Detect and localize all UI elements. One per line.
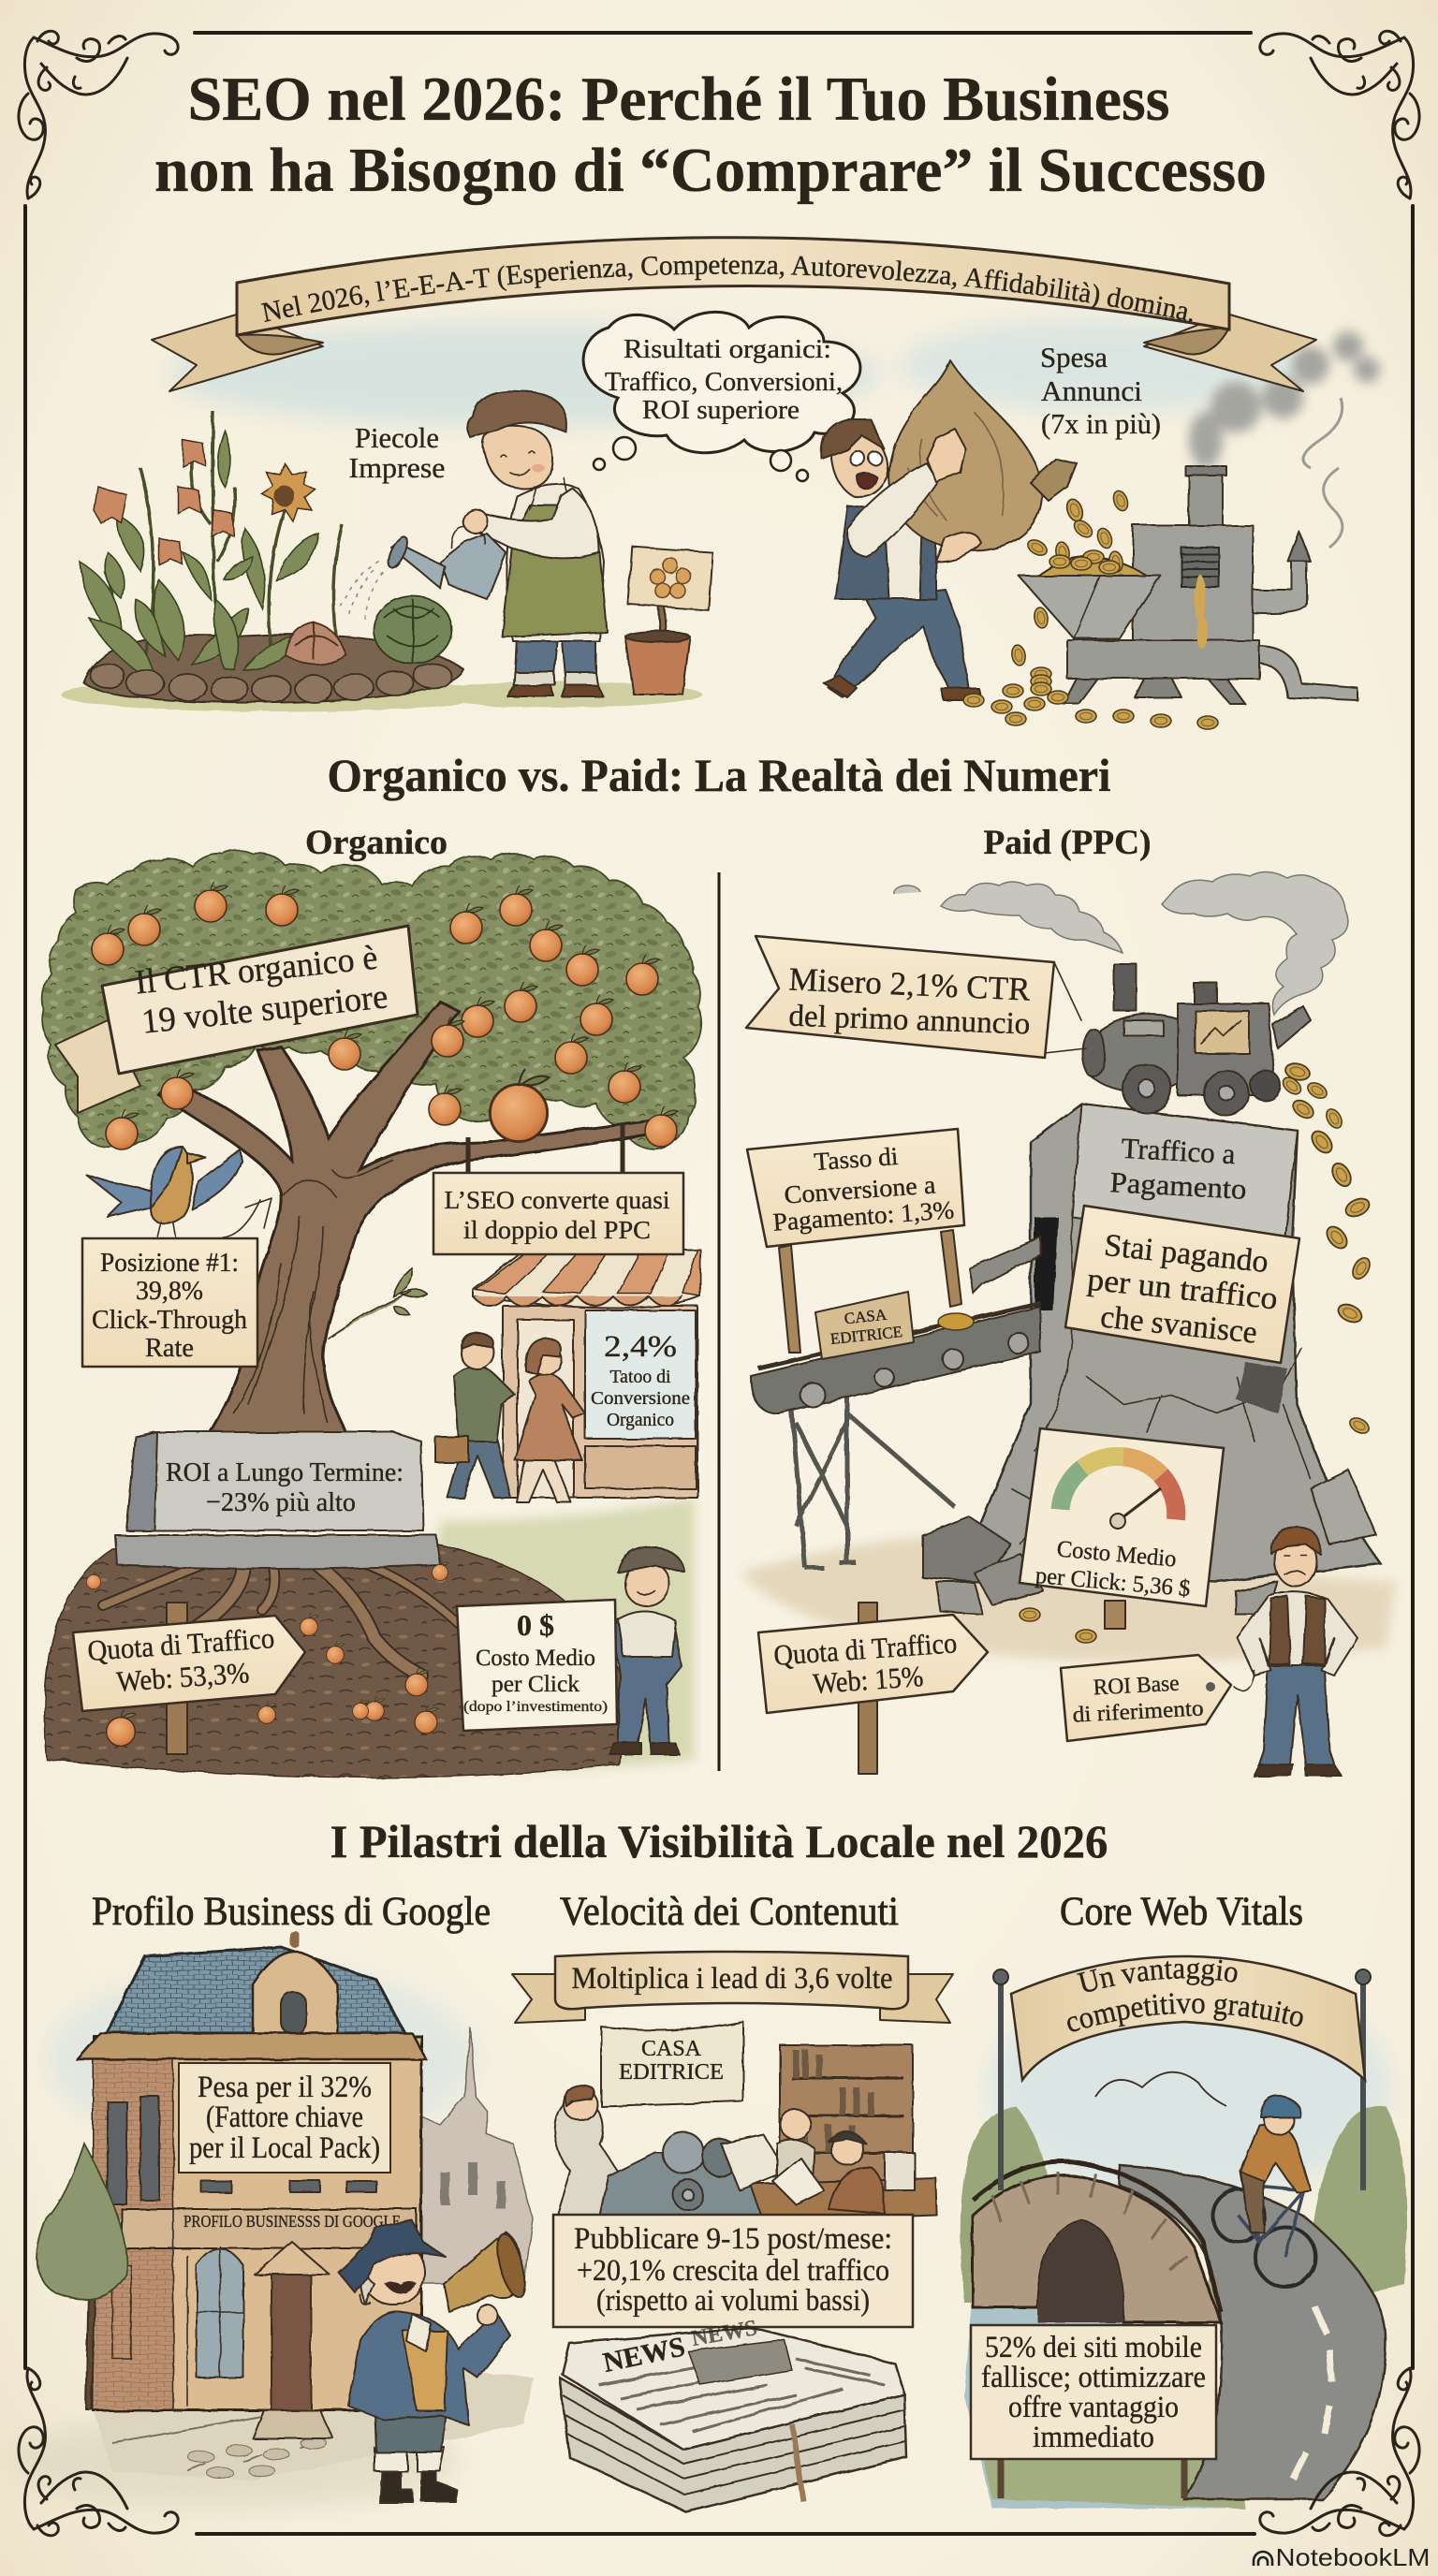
banner: organic CTR: 19 volte superiore <box>139 977 389 1042</box>
title: non ha Bisogno di “Comprare” il Successo <box>154 136 1267 205</box>
label: publish frequency <box>553 2215 913 2327</box>
watercolor backdrop <box>9 1966 477 2509</box>
heading: organic vs paid: Organico vs. Paid: La Realtà dei Numeri <box>328 749 1111 801</box>
label: publish frequency: Pubblicare 9-15 post/mese: <box>574 2222 892 2256</box>
ribbon: leads: Moltiplica i lead di 3,6 volte <box>571 1962 893 1996</box>
ornament: bottom left corner <box>19 2368 178 2536</box>
subheading: paid: Paid (PPC) <box>983 824 1152 862</box>
street tree <box>37 2144 126 2409</box>
watermark: NotebookLM: NotebookLM <box>1275 2543 1431 2571</box>
label: paid traffic: Pagamento <box>1109 1165 1247 1206</box>
conveyor belt <box>751 1237 1041 1568</box>
label: ad spend: Spesa <box>1040 341 1108 373</box>
label: organic cost per click: per Click <box>492 1672 580 1697</box>
label: organic conversion rate: Organico <box>607 1410 674 1430</box>
label: long term ROI: −23% più alto <box>206 1487 356 1517</box>
roots <box>103 1559 459 1676</box>
panel: Google Business Profile <box>9 1890 534 2509</box>
label: organic cost per click: Costo Medio <box>476 1646 595 1671</box>
signpost: paid traffic share <box>758 1603 988 1774</box>
signpost: paid traffic share: Quota di Traffico <box>772 1626 958 1672</box>
label: position 1: 39,8% <box>136 1277 203 1306</box>
label: mobile fail: 52% dei siti mobile <box>985 2331 1202 2364</box>
label: GBP weight <box>179 2063 390 2173</box>
box: publishing house <box>815 1292 974 1359</box>
arch ribbon: Un vantaggio <box>1077 1960 1238 1992</box>
label: long term ROI <box>166 1457 404 1517</box>
banner: paid CTR: Misero 2,1% CTR <box>788 960 1032 1008</box>
subheading: Velocità dei Contenuti <box>560 1890 899 1934</box>
label: ad spend <box>1040 341 1161 440</box>
thought cloud: Risultati organici: <box>624 334 831 364</box>
label: small businesses <box>348 421 446 484</box>
label: organic cost per click: 0 $ <box>517 1608 554 1642</box>
worried man <box>1234 1528 1357 1776</box>
publishing room <box>554 2022 937 2222</box>
bridge <box>973 2162 1221 2322</box>
apples <box>92 882 678 1149</box>
label: GBP weight: (Fattore chiave <box>206 2100 363 2134</box>
panel: core web vitals <box>960 1890 1408 2510</box>
bird <box>86 1147 242 1237</box>
signpost: organic traffic share: Web: 53,3% <box>115 1656 250 1698</box>
fallen fruit <box>86 1560 448 1746</box>
train engine <box>1082 964 1311 1116</box>
label: organic conversion rate <box>591 1330 690 1430</box>
heading: local pillars: I Pilastri della Visibilità Locale nel 2026 <box>330 1815 1108 1867</box>
panel: paid <box>740 871 1395 1776</box>
label: position 1: Click-Through <box>92 1306 247 1335</box>
shop sign text: PROFILO BUSINESSS DI GOOGLE <box>183 2212 401 2231</box>
sky and hills <box>961 1975 1406 2303</box>
river and banks <box>964 2256 1255 2509</box>
stone plaque <box>115 1432 440 1569</box>
signpost: organic traffic share <box>73 1603 305 1754</box>
label: publish frequency: (rispetto ai volumi bassi) <box>596 2284 870 2318</box>
label: paid traffic <box>1109 1132 1247 1206</box>
banner: paid CTR: del primo annuncio <box>788 1000 1031 1041</box>
newspaper stack <box>560 2316 906 2511</box>
road <box>1120 2165 1386 2499</box>
banner: paid CTR <box>746 936 1086 1058</box>
rock monolith <box>922 1104 1380 1615</box>
sign: paid conversion rate: Conversione a <box>784 1170 936 1209</box>
label: organic cost per click <box>457 1600 617 1731</box>
arch ribbon <box>992 1954 1372 2190</box>
sign: paid conversion rate: Pagamento: 1,3% <box>772 1195 955 1237</box>
label: long term ROI: ROI a Lungo Termine: <box>166 1457 404 1487</box>
label: organic cost per click: (dopo l’investimento) <box>463 1699 608 1715</box>
newspaper stack: NEWS <box>690 2316 759 2351</box>
signpost: paid traffic share: Web: 15% <box>812 1660 924 1700</box>
box: publishing house: EDITRICE <box>829 1323 903 1348</box>
tag: baseline ROI: ROI Base <box>1093 1672 1180 1700</box>
title <box>154 65 1267 205</box>
ornament: top left corner <box>19 31 178 198</box>
label: organic conversion rate: Conversione <box>591 1388 690 1409</box>
banner: organic CTR <box>55 926 418 1113</box>
sign: paid conversion rate: Tasso di <box>813 1142 899 1176</box>
cyclist <box>1212 2097 1315 2287</box>
label: position 1: Posizione #1: <box>100 1249 239 1278</box>
panel: intro scene <box>62 236 1386 730</box>
panel: organic <box>42 850 701 1778</box>
thought cloud <box>583 312 860 481</box>
grass and soil <box>45 1498 695 1778</box>
hanging sign: L’SEO converte quasi <box>444 1186 670 1214</box>
ribbon banner: Nel 2026, l’E-E-A-T (Esperienza, Competenza, Autorevolezza, Affidabilità) domina. <box>260 256 1193 322</box>
pavement <box>94 2359 534 2481</box>
label: mobile fail: immediato <box>1033 2421 1154 2454</box>
town crier with megaphone <box>339 2220 531 2503</box>
banner: organic CTR: Il CTR organico è <box>133 939 379 1003</box>
panel: content velocity <box>512 1890 953 2511</box>
ribbon: leads <box>512 1952 953 2023</box>
thought cloud: Traffico, Conversioni, <box>605 367 843 397</box>
boy with sign <box>609 1546 685 1754</box>
label: ad spend: (7x in più) <box>1041 407 1161 440</box>
sign: CPC gauge: Costo Medio <box>1056 1537 1178 1573</box>
sign: CPC gauge: per Click: 5,36 $ <box>1034 1563 1192 1602</box>
label: organic conversion rate: 2,4% <box>604 1330 677 1364</box>
sky wash <box>169 318 1311 426</box>
label: GBP weight: Pesa per il 32% <box>198 2071 372 2104</box>
callout: vanishing traffic <box>1065 1206 1299 1363</box>
label: position 1: Rate <box>145 1334 194 1363</box>
arrow: CTR up <box>223 1198 271 1237</box>
arch ribbon: competitivo gratuito <box>1067 1993 1303 2031</box>
customers <box>435 1333 585 1502</box>
label: position 1 <box>82 1238 257 1367</box>
falling coins <box>963 489 1218 729</box>
subheading: Profilo Business di Google <box>92 1890 491 1934</box>
poster text: CASA <box>641 2037 702 2061</box>
tree canopy <box>42 850 701 1149</box>
sign: paid conversion rate <box>747 1129 964 1353</box>
subheading: organic: Organico <box>305 824 448 862</box>
callout: vanishing traffic: per un traffico <box>1086 1262 1279 1317</box>
label: paid traffic: Traffico a <box>1121 1132 1237 1170</box>
tag: baseline ROI: di riferimento <box>1072 1696 1204 1728</box>
ornament: top right corner <box>1260 31 1419 198</box>
garden <box>61 412 702 711</box>
money furnace machine <box>1019 466 1357 704</box>
falling coins <box>1020 1061 1373 1643</box>
ornament: bottom right corner <box>1260 2368 1419 2536</box>
town skyline <box>399 2027 533 2284</box>
label: organic conversion rate: Tatoo di <box>610 1367 671 1387</box>
label: mobile fail: offre vantaggio <box>1008 2391 1179 2424</box>
label: ad spend: Annunci <box>1041 374 1142 407</box>
box: publishing house: CASA <box>844 1306 888 1327</box>
tag: baseline ROI <box>1061 1655 1231 1741</box>
shop <box>473 1250 700 1498</box>
callout: vanishing traffic: che svanisce <box>1099 1299 1259 1351</box>
plant sign <box>625 547 712 695</box>
callout: vanishing traffic: Stai pagando <box>1103 1228 1270 1280</box>
label: publish frequency: +20,1% crescita del traffico <box>577 2254 889 2288</box>
thought cloud: ROI superiore <box>642 395 800 425</box>
title: SEO nel 2026: Perché il Tuo Business <box>187 65 1170 134</box>
poster text: EDITRICE <box>619 2060 724 2085</box>
sign: CPC gauge <box>1020 1428 1224 1629</box>
signpost: organic traffic share: Quota di Traffico <box>86 1621 275 1667</box>
label: small businesses: Imprese <box>348 451 446 484</box>
subheading: Core Web Vitals <box>1060 1890 1303 1934</box>
label: mobile fail: fallisce; ottimizzare <box>981 2361 1206 2394</box>
gardener <box>340 391 607 696</box>
hanging sign <box>433 1123 683 1254</box>
label: small businesses: Piecole <box>355 421 439 454</box>
poster text <box>619 2037 724 2085</box>
hanging sign: il doppio del PPC <box>463 1216 651 1244</box>
man carrying ad money bag <box>822 360 1077 700</box>
newspaper stack: NEWS <box>600 2331 688 2378</box>
label: mobile fail <box>971 2325 1216 2498</box>
ground and smoke <box>740 871 1395 1661</box>
label: GBP weight: per il Local Pack) <box>189 2131 380 2165</box>
smoke <box>1189 331 1380 548</box>
building <box>78 1936 426 2438</box>
tree trunk <box>159 1002 667 1437</box>
ribbon banner <box>151 236 1317 392</box>
